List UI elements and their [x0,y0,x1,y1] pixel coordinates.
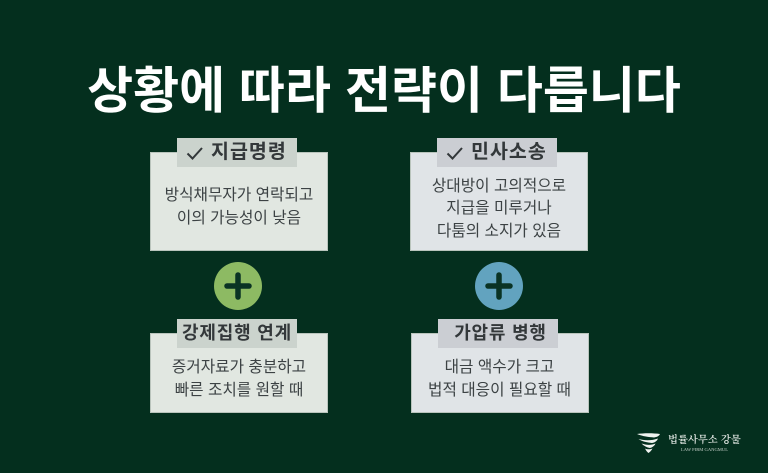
icon: logo mark [637,433,660,453]
description: 민사소송 [410,152,588,251]
heading tab: 가압류 병행 [438,319,558,348]
description: 강제집행 연계: 빠른 조치를 원할 때 [175,382,303,398]
brand name in English: LAW FIRM GANGMUL [681,447,728,452]
description: 가압류 병행: 법적 대응이 필요할 때 [428,382,571,398]
heading tab: 가압류 병행: 가압류 병행 [454,323,547,343]
description: 민사소송: 지급을 미루거나 [446,200,552,217]
heading tab: 강제집행 연계 [177,319,297,348]
logo [637,431,741,453]
description: 지급명령: 이의 가능성이 낮음 [177,210,301,226]
heading tab: 민사소송: 민사소송 [471,141,547,163]
description: 강제집행 연계 [150,333,328,413]
panel: 강제집행 연계 [150,319,328,413]
description: 지급명령 [150,152,328,251]
heading tab: 민사소송 [437,138,557,167]
description: 강제집행 연계: 증거자료가 충분하고 [172,359,306,376]
heading tab: 강제집행 연계: 강제집행 연계 [182,323,292,343]
panel: 가압류 병행 [411,319,589,413]
title: 상황에 따라 전략이 다릅니다 [87,63,681,119]
description: 가압류 병행: 대금 액수가 크고 [445,359,554,376]
heading tab: 지급명령 [177,138,297,167]
description: 가압류 병행 [410,333,588,413]
description: 민사소송: 상대방이 고의적으로 [432,178,566,194]
panel: 지급명령 [150,138,328,251]
description: 지급명령: 방식채무자가 연락되고 [165,187,313,204]
heading tab: 지급명령: 지급명령 [211,141,287,163]
description: 민사소송: 다툼의 소지가 있음 [437,222,561,240]
panel: 민사소송 [410,138,588,251]
icon: blue plus [475,262,523,310]
brand name: 법률사무소 강물 [668,431,741,446]
icon: green plus [214,262,262,310]
